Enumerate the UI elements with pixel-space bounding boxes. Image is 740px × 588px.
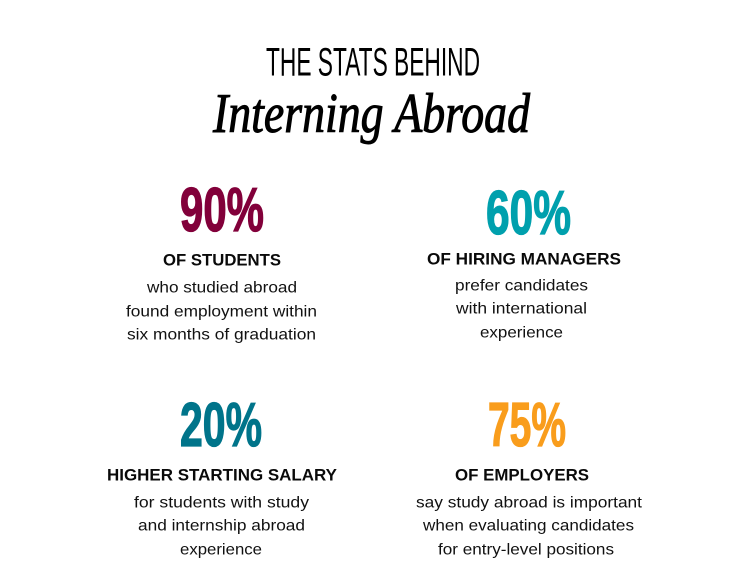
description: hiring managers: with international: [455, 300, 587, 318]
description: students: who studied abroad: [146, 280, 297, 296]
description: salary: and internship abroad: [138, 518, 305, 534]
description: hiring managers: [455, 278, 588, 342]
panel: 90% of students: [126, 176, 317, 344]
description: salary: experience: [180, 542, 262, 558]
panel: 20% higher starting salary: [107, 391, 338, 558]
panel: 75% of employers: [416, 391, 643, 558]
heading: of employers: OF EMPLOYERS: [455, 466, 589, 484]
stat: 75%: 75%: [488, 391, 566, 460]
stat: 90%: 90%: [180, 176, 264, 245]
heading: of hiring managers: OF HIRING MANAGERS: [427, 250, 621, 268]
heading: of students: OF STUDENTS: [163, 250, 281, 270]
title script line: interning abroad: Interning Abroad: [212, 83, 531, 145]
stat: 20%: 20%: [180, 391, 262, 460]
title: [212, 40, 531, 145]
description: hiring managers: experience: [480, 324, 563, 342]
description: employers: for entry-level positions: [438, 542, 614, 558]
stat: 60%: 60%: [486, 179, 571, 248]
description: salary: [134, 494, 309, 558]
description: employers: when evaluating candidates: [422, 518, 634, 534]
title line: the stats behind: THE STATS BEHIND: [266, 40, 480, 84]
description: students: found employment within: [126, 304, 317, 320]
description: students: [126, 280, 317, 344]
description: employers: say study abroad is important: [416, 494, 643, 512]
description: hiring managers: prefer candidates: [455, 278, 588, 294]
description: employers: [416, 494, 643, 558]
description: students: six months of graduation: [127, 326, 316, 344]
description: salary: for students with study: [134, 494, 309, 512]
heading: higher starting salary: HIGHER STARTING SALARY: [107, 466, 338, 484]
panel: 60% of hiring managers: [427, 179, 621, 342]
